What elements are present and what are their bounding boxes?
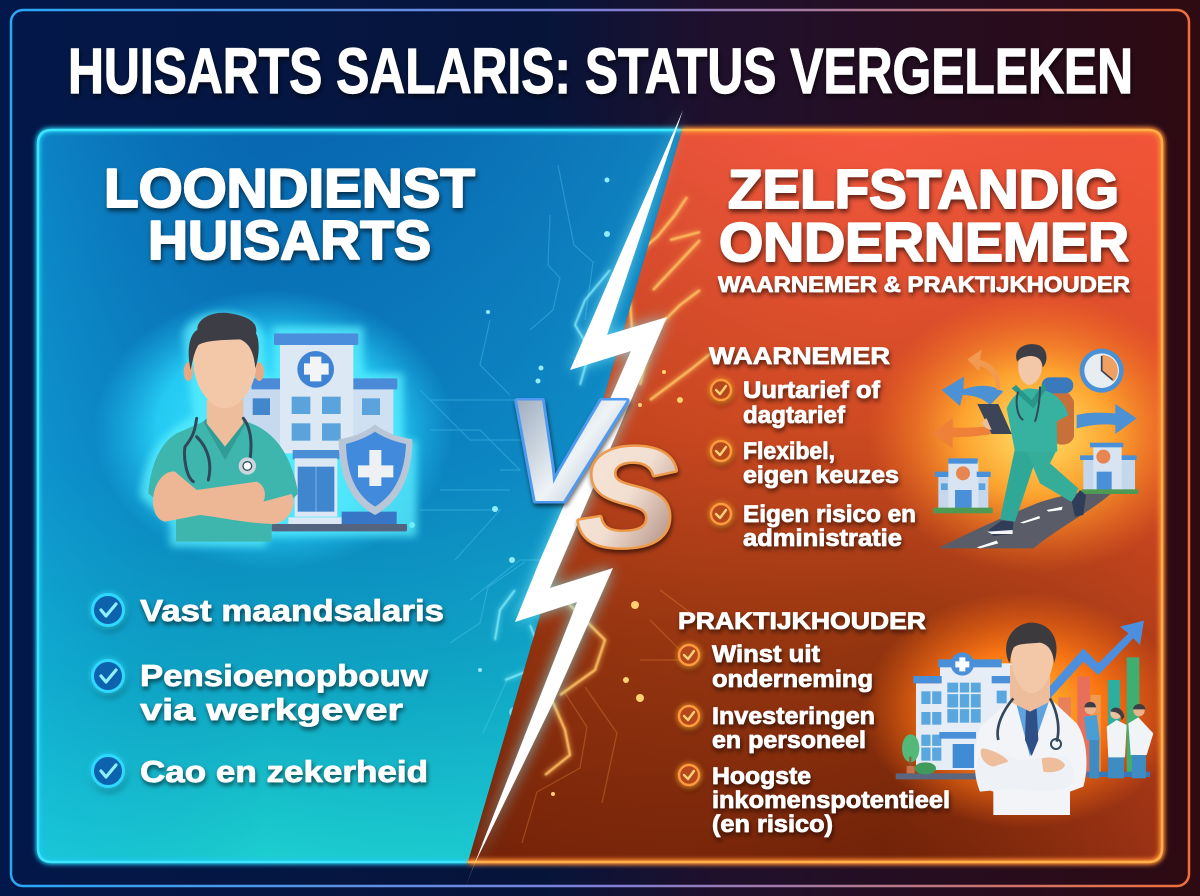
panel: zelfstandig ondernemer — [460, 130, 1200, 862]
heading: zelfstandig ondernemer: WAARNEMER & PRAKTIJKHOUDER — [718, 272, 1130, 297]
section: waarnemer: dagtarief — [743, 402, 846, 429]
section: praktijkhouder: inkomenspotentieel — [712, 787, 950, 814]
section: waarnemer: WAARNEMER — [709, 343, 890, 370]
section: waarnemer — [708, 343, 916, 552]
section: praktijkhouder: Winst uit — [712, 641, 820, 668]
VS emblem — [503, 369, 677, 577]
section: praktijkhouder: Investeringen — [712, 703, 875, 730]
section: waarnemer: Eigen risico en — [743, 501, 916, 528]
heading: zelfstandig ondernemer: ZELFSTANDIG — [728, 158, 1119, 220]
section: praktijkhouder: Hoogste — [712, 763, 811, 790]
heading: loondienst huisarts — [104, 157, 475, 271]
checklist: loondienst: Cao en zekerheid — [140, 754, 428, 789]
section: waarnemer: Flexibel, — [743, 438, 835, 465]
section: praktijkhouder — [676, 608, 950, 838]
illustration: waarnemer onderweg — [932, 344, 1138, 548]
section: waarnemer: Uurtarief of — [743, 377, 881, 404]
heading: zelfstandig ondernemer — [718, 158, 1130, 297]
section: waarnemer: administratie — [743, 525, 902, 552]
section: praktijkhouder: en personeel — [712, 727, 866, 754]
section: waarnemer: eigen keuzes — [743, 462, 899, 489]
panel: loondienst huisarts — [38, 130, 688, 862]
checklist: loondienst — [89, 591, 444, 790]
heading: loondienst huisarts: HUISARTS — [148, 209, 431, 271]
lightning bolt — [465, 110, 683, 888]
checklist: loondienst: Pensioenopbouw — [140, 658, 429, 693]
VS emblem: V — [503, 369, 627, 532]
checklist: loondienst: Vast maandsalaris — [140, 593, 444, 628]
illustration: praktijkhouder met praktijk en groeigrafiek — [896, 621, 1153, 815]
VS emblem: S — [577, 418, 677, 577]
section: praktijkhouder: PRAKTIJKHOUDER — [678, 608, 926, 635]
section: praktijkhouder: onderneming — [712, 666, 873, 693]
checklist: loondienst: via werkgever — [140, 692, 403, 727]
section: praktijkhouder: (en risico) — [712, 811, 833, 838]
heading: zelfstandig ondernemer: ONDERNEMER — [719, 211, 1129, 273]
illustration: huisarts in loondienst bij ziekenhuis — [93, 290, 453, 570]
heading: loondienst huisarts: LOONDIENST — [104, 157, 475, 219]
